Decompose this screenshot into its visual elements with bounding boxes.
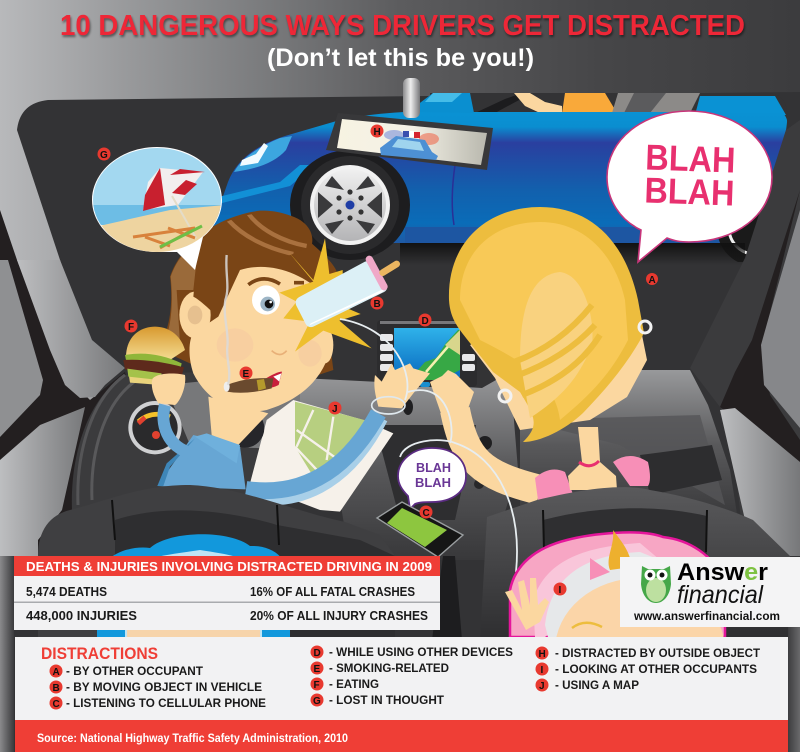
shirt: [157, 433, 246, 489]
arm to navigation: [246, 413, 382, 499]
bow: [590, 558, 610, 580]
small speech bubble: BLAH: [416, 460, 451, 475]
list column 1: - LISTENING TO CELLULAR PHONE: [66, 696, 266, 710]
police car in mirror: [380, 130, 439, 160]
hand on screen: [430, 370, 474, 425]
list column 2: [310, 645, 513, 707]
cell phone: [377, 502, 463, 557]
stats panel: [14, 556, 440, 630]
list column 2: - SMOKING-RELATED: [329, 661, 449, 675]
scene markers: H: [374, 127, 381, 138]
center console: [432, 556, 462, 640]
brow curl: [572, 623, 602, 628]
smoke: [225, 255, 229, 385]
scene markers: I: [558, 585, 562, 596]
distractions panel: [15, 637, 788, 720]
scene markers: E: [242, 369, 250, 380]
logo panel: [620, 557, 800, 627]
small speech bubble: [398, 448, 466, 509]
stats header: DEATHS & INJURIES INVOLVING DISTRACTED DRIVING IN 2009: [26, 559, 432, 574]
headphone cord: [340, 319, 517, 572]
nose smile line: [272, 351, 287, 354]
stats rows: 16% OF ALL FATAL CRASHES: [250, 585, 415, 599]
wristband: [372, 397, 405, 414]
car window and driver: [430, 93, 790, 115]
list column 2: G: [313, 696, 321, 707]
necklace: [579, 461, 599, 466]
small speech bubble: BLAH: [415, 475, 451, 490]
ear: [179, 292, 211, 338]
car body: [214, 111, 788, 243]
baby hand: [505, 578, 549, 630]
right pillar and window panes: [690, 120, 800, 556]
source bar: [15, 720, 788, 752]
baby face: [555, 578, 725, 722]
eyebrows: [248, 279, 304, 285]
list column 1: B: [52, 683, 60, 694]
distractions heading: DISTRACTIONS: [41, 644, 158, 663]
far ear: [317, 327, 333, 363]
skin behind hair: [470, 300, 647, 430]
scene markers: D: [422, 316, 429, 327]
cheeks: [217, 328, 322, 367]
starburst collision: [279, 238, 372, 352]
list column 3: - USING A MAP: [555, 678, 639, 692]
stats rows: 20% OF ALL INJURY CRASHES: [250, 609, 428, 623]
list column 1: [50, 664, 266, 710]
list column 1: A: [52, 667, 60, 678]
hair: [449, 207, 644, 442]
scene markers: C: [422, 508, 430, 519]
subtitle: (Don’t let this be you!): [267, 44, 534, 72]
list column 3: [536, 646, 761, 692]
mouth: [263, 372, 282, 388]
title: 10 DANGEROUS WAYS DRIVERS GET DISTRACTED: [60, 10, 745, 42]
baby bottle: [296, 259, 397, 327]
sand: [102, 205, 221, 252]
big speech bubble: BLAH BLAH: BLAH: [645, 136, 736, 181]
sky: [90, 145, 225, 205]
list column 2: D: [314, 648, 321, 659]
face: [189, 267, 332, 411]
list column 1: C: [52, 699, 60, 710]
eye: [252, 285, 280, 315]
list column 3: - DISTRACTED BY OUTSIDE OBJECT: [555, 646, 761, 660]
hair highlights: [228, 213, 307, 254]
list column 1: - BY MOVING OBJECT IN VEHICLE: [66, 680, 262, 694]
logo wordmark: [677, 559, 768, 609]
list column 3: J: [539, 681, 545, 692]
sea: [90, 205, 225, 225]
front wheel: [290, 150, 410, 260]
list column 2: E: [314, 664, 320, 675]
cigar: [224, 378, 273, 393]
shadow below car: [400, 243, 745, 265]
steering wheel: driver: [38, 485, 395, 640]
driver: man distracted: [123, 211, 430, 512]
icon: owl: [641, 566, 671, 603]
pink top: [535, 456, 650, 500]
list column 3: I: [540, 665, 544, 676]
stats header: [14, 556, 440, 576]
blue car outside the windshield: [214, 93, 793, 266]
umbrella: [143, 168, 205, 238]
list column 2: - LOST IN THOUGHT: [329, 693, 445, 707]
baby in back seat, pink bonnet: [505, 530, 725, 722]
car navigation unit: [377, 320, 492, 489]
sleeve holding burger: [163, 405, 192, 453]
neck: [208, 397, 268, 447]
stats rows: [14, 576, 440, 630]
list column 1: - BY OTHER OCCUPANT: [66, 664, 204, 678]
stats rows: 448,000 INJURIES: [26, 609, 137, 623]
logo wordmark: financial: [677, 581, 764, 609]
baby in back seat, blue bonnet: [97, 534, 290, 637]
list column 2: - EATING: [329, 677, 379, 691]
hair curl: [609, 530, 632, 570]
arm: [455, 410, 540, 490]
scene markers: [98, 124, 658, 596]
list column 3: - LOOKING AT OTHER OCCUPANTS: [555, 662, 757, 676]
stats rows: 5,474 DEATHS: [26, 585, 107, 599]
mirror post: [403, 78, 420, 118]
scene markers: A: [648, 275, 656, 286]
map: [250, 400, 393, 512]
list column 2: - WHILE USING OTHER DEVICES: [329, 645, 513, 659]
neck and shoulders: [568, 427, 617, 490]
thought bubble: beach: [90, 145, 225, 270]
scene markers: J: [332, 404, 338, 415]
passenger: woman hair and body: [430, 207, 651, 500]
steering cluster gauges: [128, 401, 264, 454]
logo wordmark: Answer: [677, 559, 768, 586]
rear-view mirror: [326, 113, 493, 170]
left window pillars: [0, 210, 130, 556]
logo url: www.answerfinancial.com: [633, 611, 780, 623]
car headlight: [234, 136, 292, 172]
hand holding burger: [152, 374, 185, 405]
hand on screen: [374, 363, 430, 408]
seat: passenger: [480, 487, 790, 640]
tooth: [273, 373, 281, 382]
rear wheel: [718, 214, 759, 262]
list column 2: F: [314, 680, 320, 691]
fringe hair: [193, 213, 312, 317]
dashboard and passenger seat headrest: [72, 370, 738, 560]
scene markers: B: [374, 299, 381, 310]
scene markers: F: [128, 322, 134, 333]
back hair: [157, 211, 337, 377]
instrument binnacle: [72, 372, 300, 510]
list column 3: H: [538, 649, 546, 660]
earrings: [499, 321, 651, 402]
side edges below the window: [0, 556, 800, 752]
beach chair: [133, 228, 195, 248]
big speech bubble: BLAH BLAH: BLAH: [644, 169, 735, 214]
big speech bubble: BLAH BLAH: [607, 111, 772, 262]
scene markers: G: [100, 150, 108, 161]
burger: [123, 327, 185, 385]
source bar: Source: National Highway Traffic Safety Administration, 2010: [37, 733, 348, 745]
